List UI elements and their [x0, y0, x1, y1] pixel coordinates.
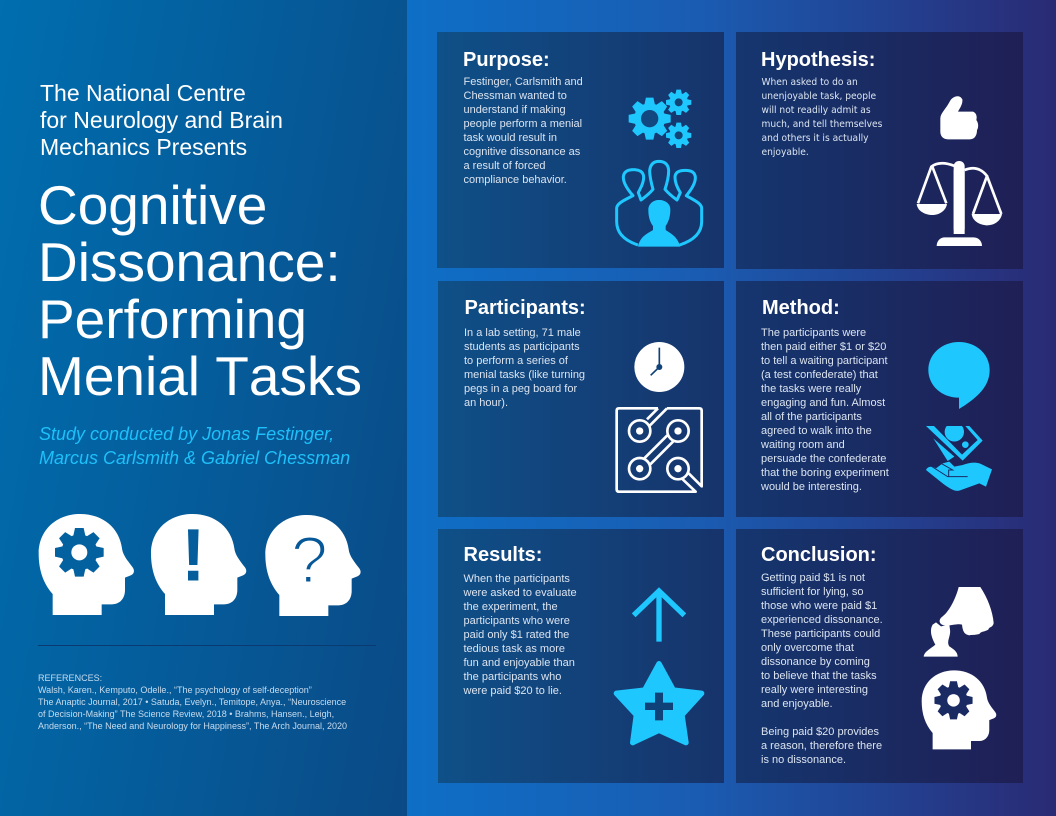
icon: hand pointing at person: [924, 587, 994, 657]
icon: head with question mark: [265, 515, 361, 616]
panel: conclusion: [736, 529, 1023, 783]
icon: circuit board: [616, 408, 701, 492]
subtitle: study authors: Study conducted by Jonas Festinger, Marcus Carlsmith & Gabriel Chessman: [39, 424, 350, 468]
icon: clock and circuit: [615, 342, 703, 493]
heading: purpose: Purpose:: [463, 49, 550, 71]
icon: head with exclamation mark: [151, 514, 246, 615]
icon: star with plus: [616, 664, 702, 743]
text: purpose: Festinger, Carlsmith and Chessman wanted to understand if making people perform a menial task would result in cognitive dissonance as a result of forced compliance behavior.: [464, 76, 583, 186]
icon: gears and people: [615, 90, 704, 247]
icon: head with gear: [922, 670, 996, 749]
heading: conclusion: Conclusion:: [761, 544, 877, 566]
text: conclusion: Getting paid $1 is not sufficient for lying, so those who were paid $1 experienced dissonance. These participants could only overcome that dissonance by coming to believe that the tasks really were interesting and enjoyable. Being paid $20 provides a reason, therefore there is no dissonance.: [761, 572, 883, 766]
icon: head with exclamation mark: !: [181, 514, 206, 597]
icon: three heads: [38, 514, 361, 616]
icon: money in hand: [926, 426, 992, 491]
icon: head with question mark: ?: [291, 523, 328, 597]
references: REFERENCES: Walsh, Karen., Kemputo, Odelle., “The psychology of self-deception” The Anaptic Journal, 2017 • Satuda, Evelyn., Temitope, Anya., “Neuroscience of Decision-Making” The Science Review, 2018 • Brahms, Hansen., Leigh, Anderson., “The Need and Neurology for Happiness”, The Arch Journal, 2020: [38, 673, 347, 731]
icon: group of people: [616, 161, 701, 247]
panel: results: [438, 529, 724, 783]
icon: pointing hand and head: [922, 587, 996, 750]
icon: speech bubble: [928, 342, 990, 409]
presenter heading: The National Centre for Neurology and Brain Mechanics Presents: [40, 80, 283, 160]
icon: head with gear: [39, 514, 134, 615]
icon: thumbs up: [940, 96, 978, 139]
title: Cognitive Dissonance: Performing Menial Tasks: [38, 174, 362, 407]
icon: clock: [634, 342, 684, 392]
heading: hypothesis: Hypothesis:: [761, 49, 875, 71]
icon: thumb and scales: [916, 96, 1002, 246]
icon: balance scales: [916, 161, 1002, 246]
icon: up arrow: [634, 591, 684, 642]
panel: left title column: [0, 0, 407, 816]
text: participants: In a lab setting, 71 male students as participants to perform a series of menial tasks (like turning pegs in a peg board for an hour).: [464, 327, 585, 409]
icon: arrow and star: [614, 587, 704, 746]
icon: speech bubble and money: [926, 342, 992, 491]
panel: purpose: [437, 32, 724, 268]
panel: participants: [438, 281, 724, 517]
text: results: When the participants were asked to evaluate the experiment, the participants who were paid only $1 rated the tedious task as more fun and enjoyable than the participants who were paid $20 to lie.: [464, 573, 577, 697]
heading: results: Results:: [464, 544, 542, 566]
heading: participants: Participants:: [464, 297, 586, 319]
panel: method: [736, 281, 1023, 517]
text: hypothesis: When asked to do an unenjoyable task, people will not readily admit as much, and tell themselves and others it is actually enjoyable.: [762, 77, 882, 158]
panel: hypothesis: [736, 32, 1023, 269]
heading: method: Method:: [762, 297, 840, 319]
icon: gears: [628, 90, 691, 148]
text: method: The participants were then paid either $1 or $20 to tell a waiting participant (a test confederate) that the tasks were really engaging and fun. Almost all of the participants agreed to walk into the waiting room and persuade the confederate that the boring experiment would be interesting.: [761, 327, 889, 493]
